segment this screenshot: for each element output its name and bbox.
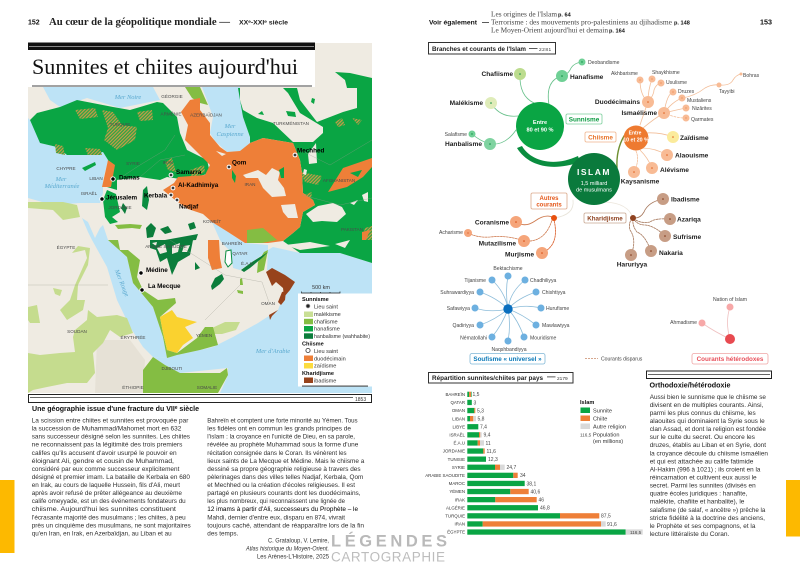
diagram: soufisme: Mouridisme xyxy=(530,336,556,342)
bar chart: QATAR xyxy=(451,400,465,405)
diagram: branches: Nizârites xyxy=(692,106,712,112)
text column orthodoxie: Al-Hakim (996 à 1021) ; ils croient en la xyxy=(650,466,761,473)
map legend: duodécimain xyxy=(314,356,346,362)
map legend: Lieu saint xyxy=(314,304,338,310)
text column 1: considéré par eux comme successeur explicitement xyxy=(32,466,180,473)
text column 2: 12 imams à partir d'Ali, successeurs du Prophète – le xyxy=(207,506,358,513)
diagram: branches: Chiisme xyxy=(588,134,613,142)
text column orthodoxie: réincarnation et cultivent eux aussi le xyxy=(650,474,757,482)
diagram: branches: Ismaélisme xyxy=(621,110,657,117)
sea labels: Caspienne xyxy=(217,131,244,138)
ibadi brown xyxy=(266,268,295,320)
source credit: Atlas historique du Moyen-Orient. xyxy=(245,546,329,552)
orange duodecimain xyxy=(102,98,372,270)
text column 2: lieux saints de La Mecque et Médine. Mais le chiisme a xyxy=(207,458,365,465)
map xyxy=(28,43,372,393)
diagram: branches: Nakaria xyxy=(659,250,683,257)
sea labels: Méditerranée xyxy=(44,183,80,190)
text column 2: toujours caché, attendant de réapparaître lors de la fin xyxy=(207,522,364,529)
hanafi green xyxy=(30,68,372,263)
text column 2: révélée au prophète Muhammad sous la forme d'une xyxy=(207,442,359,449)
diagram: branches xyxy=(439,58,760,268)
diagram: branches: 80 et 90 % xyxy=(526,128,554,134)
heading box: répartition xyxy=(428,372,573,383)
holy cities: La Mecque xyxy=(148,283,181,290)
text column 2: dessiné sa propre géographie religieuse à travers des xyxy=(207,466,361,473)
bar chart: 116,5 xyxy=(630,530,642,535)
diagram: branches: 10 et 20 % xyxy=(623,138,649,144)
diagram: branches: Shaykhisme xyxy=(652,70,680,76)
diagram: soufisme: Bektachisme xyxy=(493,266,523,272)
diagram: soufisme: Naqshbandiyya xyxy=(491,347,527,353)
diagram: branches: 1,5 milliard xyxy=(581,181,607,187)
bar chart: ÉGYPTE xyxy=(447,530,465,535)
chiite node xyxy=(624,126,648,150)
text column 1: La scission entre chiites et sunnites est provoquée par xyxy=(32,418,189,424)
bar chart: 91,6 xyxy=(607,522,617,528)
bar chart: ALGÉRIE xyxy=(446,505,465,510)
diagram: branches: Ibadisme xyxy=(671,196,700,204)
bar chart: 46,8 xyxy=(540,506,550,512)
map scale: 500 km xyxy=(312,285,330,291)
bar chart: SYRIE xyxy=(452,465,465,470)
diagram: branches: de musulmans xyxy=(576,188,612,194)
text column orthodoxie: divisent en de multiples courants. Ainsi, xyxy=(650,402,764,409)
holy cities: Samarra xyxy=(176,169,202,176)
text column orthodoxie: secret. Parmi les sunnites (divisés en xyxy=(650,483,756,490)
diagram: branches: Salafisme xyxy=(445,132,467,138)
page header right: Les origines de l'Islam xyxy=(491,10,557,18)
holy cities: Jérusalem xyxy=(106,194,138,202)
sea labels: Mer xyxy=(55,176,67,183)
holy cities: Mechhed xyxy=(297,148,324,154)
diagram: branches: Kharidjisme xyxy=(587,216,623,222)
diagram: branches: Chafiisme xyxy=(481,71,513,78)
diagram: branches: Haruriyya xyxy=(617,262,648,268)
diagram: soufisme: Tijanisme xyxy=(464,278,486,284)
text column 2: récitation consignée dans le Coran. Ils vénèrent les xyxy=(207,450,347,457)
bar chart: 38,1 xyxy=(526,481,536,487)
map legend: Kharidjisme xyxy=(302,371,334,377)
text column orthodoxie: quatre écoles juridiques : hanafite, xyxy=(650,491,748,498)
diagram: branches: Kaysanisme xyxy=(621,178,660,186)
page header right: p. 164 xyxy=(609,28,626,34)
borders xyxy=(28,135,372,320)
diagram: soufisme: Qadiriyya xyxy=(452,323,474,329)
map legend xyxy=(298,294,372,387)
hatching xyxy=(55,108,372,240)
bar chart: 34 xyxy=(520,473,526,479)
iran deserts xyxy=(216,143,368,250)
diagram: branches: Usulisme xyxy=(666,80,687,86)
text column 1: calife omeyyade, est un des événements fondateurs du xyxy=(32,498,186,505)
holy cities: Al-Kadhimiya xyxy=(178,182,219,189)
map legend: Lieu saint xyxy=(314,349,338,355)
map legend: malékisme xyxy=(314,312,341,318)
bar chart: 1,5 xyxy=(472,392,480,398)
heading box: branches: 2281 xyxy=(539,47,552,53)
diagram: soufisme: Soufisme « universel » xyxy=(473,356,542,363)
text column orthodoxie: sur le culte du secret. Ou encore les xyxy=(650,434,756,441)
diagram: branches: Hanafisme xyxy=(570,74,604,81)
text column 1: qu'en Iran, en Irak, en Azerbaïdjan, au Liban et au xyxy=(32,530,172,537)
source credit: C. Grataloup, V. Lemire, xyxy=(268,538,329,544)
text column orthodoxie: lecture littéraliste du Coran. xyxy=(650,531,730,538)
country labels: ARABIE SAOUDITE xyxy=(145,244,187,249)
text column 1: l'écrasante majorité des musulmans ; les chiites, à peu xyxy=(32,514,186,521)
source credit: Les Arènes-L'Histoire, 2025 xyxy=(257,554,329,560)
map legend: hanbalisme (wahhabite) xyxy=(314,334,370,340)
diagram: branches: Duodécimains xyxy=(595,99,640,106)
text column orthodoxie: parmi les plus connus du chiisme, les xyxy=(650,410,756,417)
diagram: branches: Mutazilisme xyxy=(479,240,516,248)
diagram: soufisme: Chadhiliyya xyxy=(530,278,556,284)
map legend: zaïdisme xyxy=(314,364,336,370)
country labels: SYRIE xyxy=(126,161,140,166)
country labels: TURQUIE xyxy=(110,122,130,127)
diagram: branches: Coranisme xyxy=(475,220,509,226)
sea labels xyxy=(44,94,290,355)
bar chart: 5,8 xyxy=(478,416,485,422)
text column orthodoxie: alaouites qui dominaient la Syrie sous le xyxy=(650,418,765,425)
heading box: répartition: Répartition sunnites/chiites par pays xyxy=(432,375,543,382)
bar chart: OMAN xyxy=(452,408,465,413)
country labels: OMAN xyxy=(261,301,275,306)
diagram: branches: Qarmates xyxy=(691,117,714,123)
text column 1: ne reconnaissent pas la légitimité des trois premiers xyxy=(32,442,183,449)
bar chart: 5,3 xyxy=(477,408,484,414)
bar chart: 11,6 xyxy=(486,449,496,455)
map bottom frame xyxy=(28,394,372,403)
bar chart legend: Chiite xyxy=(593,416,607,422)
map legend: ibadisme xyxy=(314,378,336,384)
diagram: soufisme: Mawlawiyya xyxy=(542,323,570,329)
country labels: BAHREÏN xyxy=(222,240,242,246)
bar chart: 46 xyxy=(538,498,544,504)
text column 1: en Irak, au cours de laquelle Hussein, fils d'Ali, meurt xyxy=(32,482,180,489)
bar chart: BAHREÏN xyxy=(445,392,465,397)
country labels: QATAR xyxy=(232,251,248,256)
page header right: 153 xyxy=(760,18,772,26)
title block: Sunnites et chiites aujourd'hui xyxy=(32,54,298,79)
country labels: IRAN xyxy=(245,182,255,187)
diagram: branches: Malékisme xyxy=(450,100,483,107)
bar chart: ISRAËL xyxy=(449,432,466,438)
diagram: branches: Alévisme xyxy=(660,167,689,174)
diagram: branches: Zaïdisme xyxy=(680,135,709,142)
diagram: soufisme: Suhrawardiyya xyxy=(440,290,474,296)
holy cities: Qom xyxy=(232,160,247,166)
diagram: branches: Alaouisme xyxy=(675,152,709,160)
holy cities: Damas xyxy=(119,174,140,182)
diagram: branches: Entre xyxy=(629,130,642,136)
arabia hanbali patches xyxy=(121,203,268,290)
zaidi yellow xyxy=(160,310,197,353)
sea labels: Mer Noire xyxy=(114,94,141,101)
map bottom frame: 1853 xyxy=(355,397,366,403)
map scale xyxy=(302,285,340,293)
bar chart: ARABIE SAOUDITE xyxy=(425,473,465,478)
text column 1: chiisme. Aujourd'hui les sunnites constituent xyxy=(32,506,176,513)
text column 1 xyxy=(32,418,191,537)
country labels: IRAK xyxy=(163,160,174,165)
text column 1: éloignant Ali, gendre et cousin de Muhammad, xyxy=(32,458,174,465)
country labels: YÉMEN xyxy=(196,332,212,338)
bar chart: MAROC xyxy=(449,481,465,486)
diagram: courants hétérodoxes: Courants hétérodoxes xyxy=(697,356,764,363)
holy cities: Médine xyxy=(146,267,168,274)
diagram: branches: Deobandisme xyxy=(588,60,620,66)
text column orthodoxie: Aussi bien le sunnisme que le chiisme se xyxy=(650,394,766,401)
bar chart: 40,6 xyxy=(530,489,540,495)
country labels: AFGHANISTAN xyxy=(323,178,355,183)
country labels: CHYPRE xyxy=(56,166,76,171)
diagram: courants hétérodoxes: Nation of Islam xyxy=(713,297,747,303)
legend: courants disparus: Courants disparus xyxy=(601,356,643,362)
page header right: Le Moyen-Orient aujourd'hui et demain xyxy=(491,26,608,34)
text column 1: sans successeur désigné selon les sunnites. Les chiites xyxy=(32,434,191,441)
country labels: ÉRYTHRÉE xyxy=(121,334,145,340)
text column 2: les fidèles ont en commun les grands principes de xyxy=(207,426,351,433)
shafi green xyxy=(108,87,268,393)
text column 1: désigné et premier imam. La bataille de Kerbala en 680 xyxy=(32,474,190,481)
country labels xyxy=(56,93,363,390)
text column 2: les plus nombreux, qui reconnaissent une lignée de xyxy=(207,498,345,505)
country labels: ARMÉNIE xyxy=(161,110,181,116)
diagram: branches: Azariqa xyxy=(677,216,701,224)
page header right: Voir également xyxy=(429,20,478,26)
bar chart: 12,3 xyxy=(488,457,498,463)
country labels: ÉTHIOPIE xyxy=(122,384,144,390)
bar chart: 87,5 xyxy=(601,514,611,520)
title block xyxy=(28,42,315,87)
page header right: p. 64 xyxy=(558,12,572,18)
bar chart: TUNISIE xyxy=(448,457,465,462)
islam node xyxy=(568,153,620,205)
bar chart xyxy=(425,392,643,535)
source credit xyxy=(245,538,329,560)
country labels: KOWEÏT xyxy=(203,218,221,224)
arid ethiopia tint xyxy=(95,340,145,393)
bar chart: LIBAN xyxy=(452,416,465,421)
text column 2: et Mechhed ou la création d'écoles religieuses. Il est xyxy=(207,482,355,489)
diagram: branches: Mustaliens xyxy=(687,98,712,104)
sunni node xyxy=(516,102,564,150)
bar chart legend: Islam xyxy=(580,400,594,406)
bar chart: JORDANIE xyxy=(443,449,465,454)
text column 2: Mahdi, dernier d'entre eux, disparu en 874, vivrait xyxy=(207,514,345,521)
diagram: soufisme xyxy=(440,266,570,364)
text column 1: la succession de Muhammad/Mahomet mort en 632 xyxy=(32,426,182,433)
heading box: répartition: 2179 xyxy=(557,376,568,382)
text column 1: près un cinquième des musulmans, ne sont majoritaires xyxy=(32,522,191,529)
country labels: JORDANIE xyxy=(108,205,132,210)
text column 2: Bahreïn et comptent une forte minorité au Yémen. Tous xyxy=(207,418,358,424)
orthodoxie frame xyxy=(646,371,772,378)
text column orthodoxie: clan Assad, et dont la religion est fondée xyxy=(650,426,766,433)
bar chart legend: Autre religion xyxy=(593,424,626,430)
autres courants xyxy=(531,193,567,209)
chiite dots xyxy=(628,72,742,178)
diagram: soufisme: Safawiyya xyxy=(447,306,470,312)
bar chart: TURQUIE xyxy=(445,514,465,518)
bar chart: YÉMEN xyxy=(449,489,465,494)
sea labels: Mer d'Arabie xyxy=(255,348,290,355)
diagram: courants hétérodoxes: Ahmadisme xyxy=(670,320,697,326)
connector xyxy=(517,146,580,167)
watermark: LÉGENDES xyxy=(331,532,447,550)
text column orthodoxie: stricte fidélité à la doctrine des anciens, xyxy=(650,515,765,522)
text column orthodoxie: druzes, établis au Liban et en Syrie, dont xyxy=(650,442,766,449)
page header left: Au cœur de la géopolitique mondiale — xyxy=(49,17,230,28)
bar chart: É.A.U xyxy=(454,441,465,446)
bar chart: LIBYE xyxy=(453,424,465,429)
text column 2: partagé en plusieurs courants dont les duodécimains, xyxy=(207,490,361,497)
holy cities xyxy=(100,148,324,292)
country labels: PAKISTAN xyxy=(341,227,363,232)
holy cities: Nadjaf xyxy=(179,204,199,210)
bar chart legend: (en millions) xyxy=(593,439,623,445)
text column orthodoxie: malékite, chafiite et hanbalite), le xyxy=(650,499,745,506)
country labels: GÉORGIE xyxy=(161,93,183,99)
page header left xyxy=(28,17,289,28)
yellow page tabs xyxy=(0,480,800,553)
page header right: Terrorisme : des mouvements pro-palestiniens au djihadisme xyxy=(491,18,673,26)
bar chart: 7,4 xyxy=(480,425,487,431)
text column 2: des temps. xyxy=(207,530,238,537)
map legend: Sunnisme xyxy=(302,297,329,303)
links xyxy=(468,62,741,255)
light green malekism xyxy=(28,202,240,393)
page header right: p. 148 xyxy=(674,20,690,26)
map legend: chafiisme xyxy=(314,319,338,325)
diagram: branches: Druzes xyxy=(678,89,695,95)
country labels: SOUDAN xyxy=(67,329,87,334)
bar chart legend: 116,5 xyxy=(580,432,592,438)
page header left: XXᵉ-XXIᵉ siècle xyxy=(239,20,289,26)
text column 1: après avoir refusé de prêter allégeance au deuxième xyxy=(32,490,182,497)
page header right xyxy=(429,10,772,34)
country labels: AZERBAÏDJAN xyxy=(190,112,222,118)
country labels: LIBAN xyxy=(89,176,103,181)
diagram: branches: Murjisme xyxy=(505,252,534,258)
bar chart: 11 xyxy=(486,441,491,447)
diagram: branches: Entre xyxy=(533,120,547,126)
map legend: Chiisme xyxy=(302,342,324,348)
diagram: branches: Bohras xyxy=(743,73,760,79)
diagram: branches: Akhbarisme xyxy=(611,71,638,77)
text column orthodoxie: le Prophète et ses compagnons, et la xyxy=(650,523,756,530)
bar chart: IRAK xyxy=(455,497,465,502)
heading: orthodoxie: Orthodoxie/hétérodoxie xyxy=(650,380,730,390)
kharidjisme xyxy=(584,213,626,223)
diagram: soufisme: Chishtiyya xyxy=(542,290,566,296)
diagram: branches: courants xyxy=(536,202,562,208)
country labels: É.A.U xyxy=(241,260,253,266)
bar chart legend: Population xyxy=(593,432,619,438)
diagram: branches: Autres xyxy=(539,196,559,202)
text column 2: l'islam : la croyance en l'unicité de Dieu, en sa parole, xyxy=(207,434,355,441)
text column orthodoxie: la croyance découle du chiisme ismaélien xyxy=(650,450,768,457)
heading box: branches: Branches et courants de l'Islam xyxy=(432,46,526,53)
bar chart: 9,4 xyxy=(484,433,491,439)
diagram: branches: ISLAM xyxy=(577,167,611,177)
text column orthodoxie: et qui est attachée au calife fatimide xyxy=(650,458,754,465)
diagram: branches: Tayyibi xyxy=(719,89,735,95)
sea labels: Mer xyxy=(224,123,236,130)
country labels: DJIBOUTI xyxy=(162,366,182,371)
seas xyxy=(28,87,372,393)
text column 1: califes qu'ils accusent d'avoir usurpé le pouvoir en xyxy=(32,450,177,457)
country labels: ISRAËL xyxy=(81,190,98,196)
country labels: TURKMÉNISTAN xyxy=(273,120,309,126)
map legend: hanafisme xyxy=(314,327,340,333)
diagram: branches: Sunnisme xyxy=(569,116,600,124)
bar chart: IRAN xyxy=(454,522,465,527)
country labels: SOMALIE xyxy=(197,385,217,390)
bar chart legend: Sunnite xyxy=(593,408,612,414)
diagram: soufisme: Nématollahi xyxy=(460,336,487,342)
page header left: 152 xyxy=(28,20,40,26)
holy cities: Kerbala xyxy=(144,192,168,200)
bar chart: 3 xyxy=(474,400,476,406)
diagram: branches: Hanbalisme xyxy=(445,141,482,148)
text column 2: pèlerinages dans des villes telles Nadjaf, Kerbala, Qom xyxy=(207,474,363,481)
sea labels: Mer Rouge xyxy=(113,268,130,298)
text column 2 xyxy=(207,418,365,537)
bar chart legend xyxy=(580,400,626,445)
sunni dots xyxy=(468,58,586,150)
beige central asia xyxy=(240,88,357,142)
heading: géographie: Une géographie issue d'une fracture du VIIᵉ siècle xyxy=(32,404,199,413)
diagram: soufisme: Hurufisme xyxy=(546,306,569,312)
diagram: branches: Sufrisme xyxy=(673,234,702,241)
text column orthodoxie xyxy=(650,394,768,538)
watermark xyxy=(331,532,447,564)
diagram: courants hétérodoxes xyxy=(670,297,768,364)
country labels: ÉGYPTE xyxy=(57,244,75,250)
bar chart: 24,7 xyxy=(506,465,516,471)
diagram: branches: Acharisme xyxy=(439,230,463,236)
text column orthodoxie: salafisme (de salaf, « ancêtre ») prêche la xyxy=(650,507,766,514)
heading box: branches xyxy=(428,42,556,54)
